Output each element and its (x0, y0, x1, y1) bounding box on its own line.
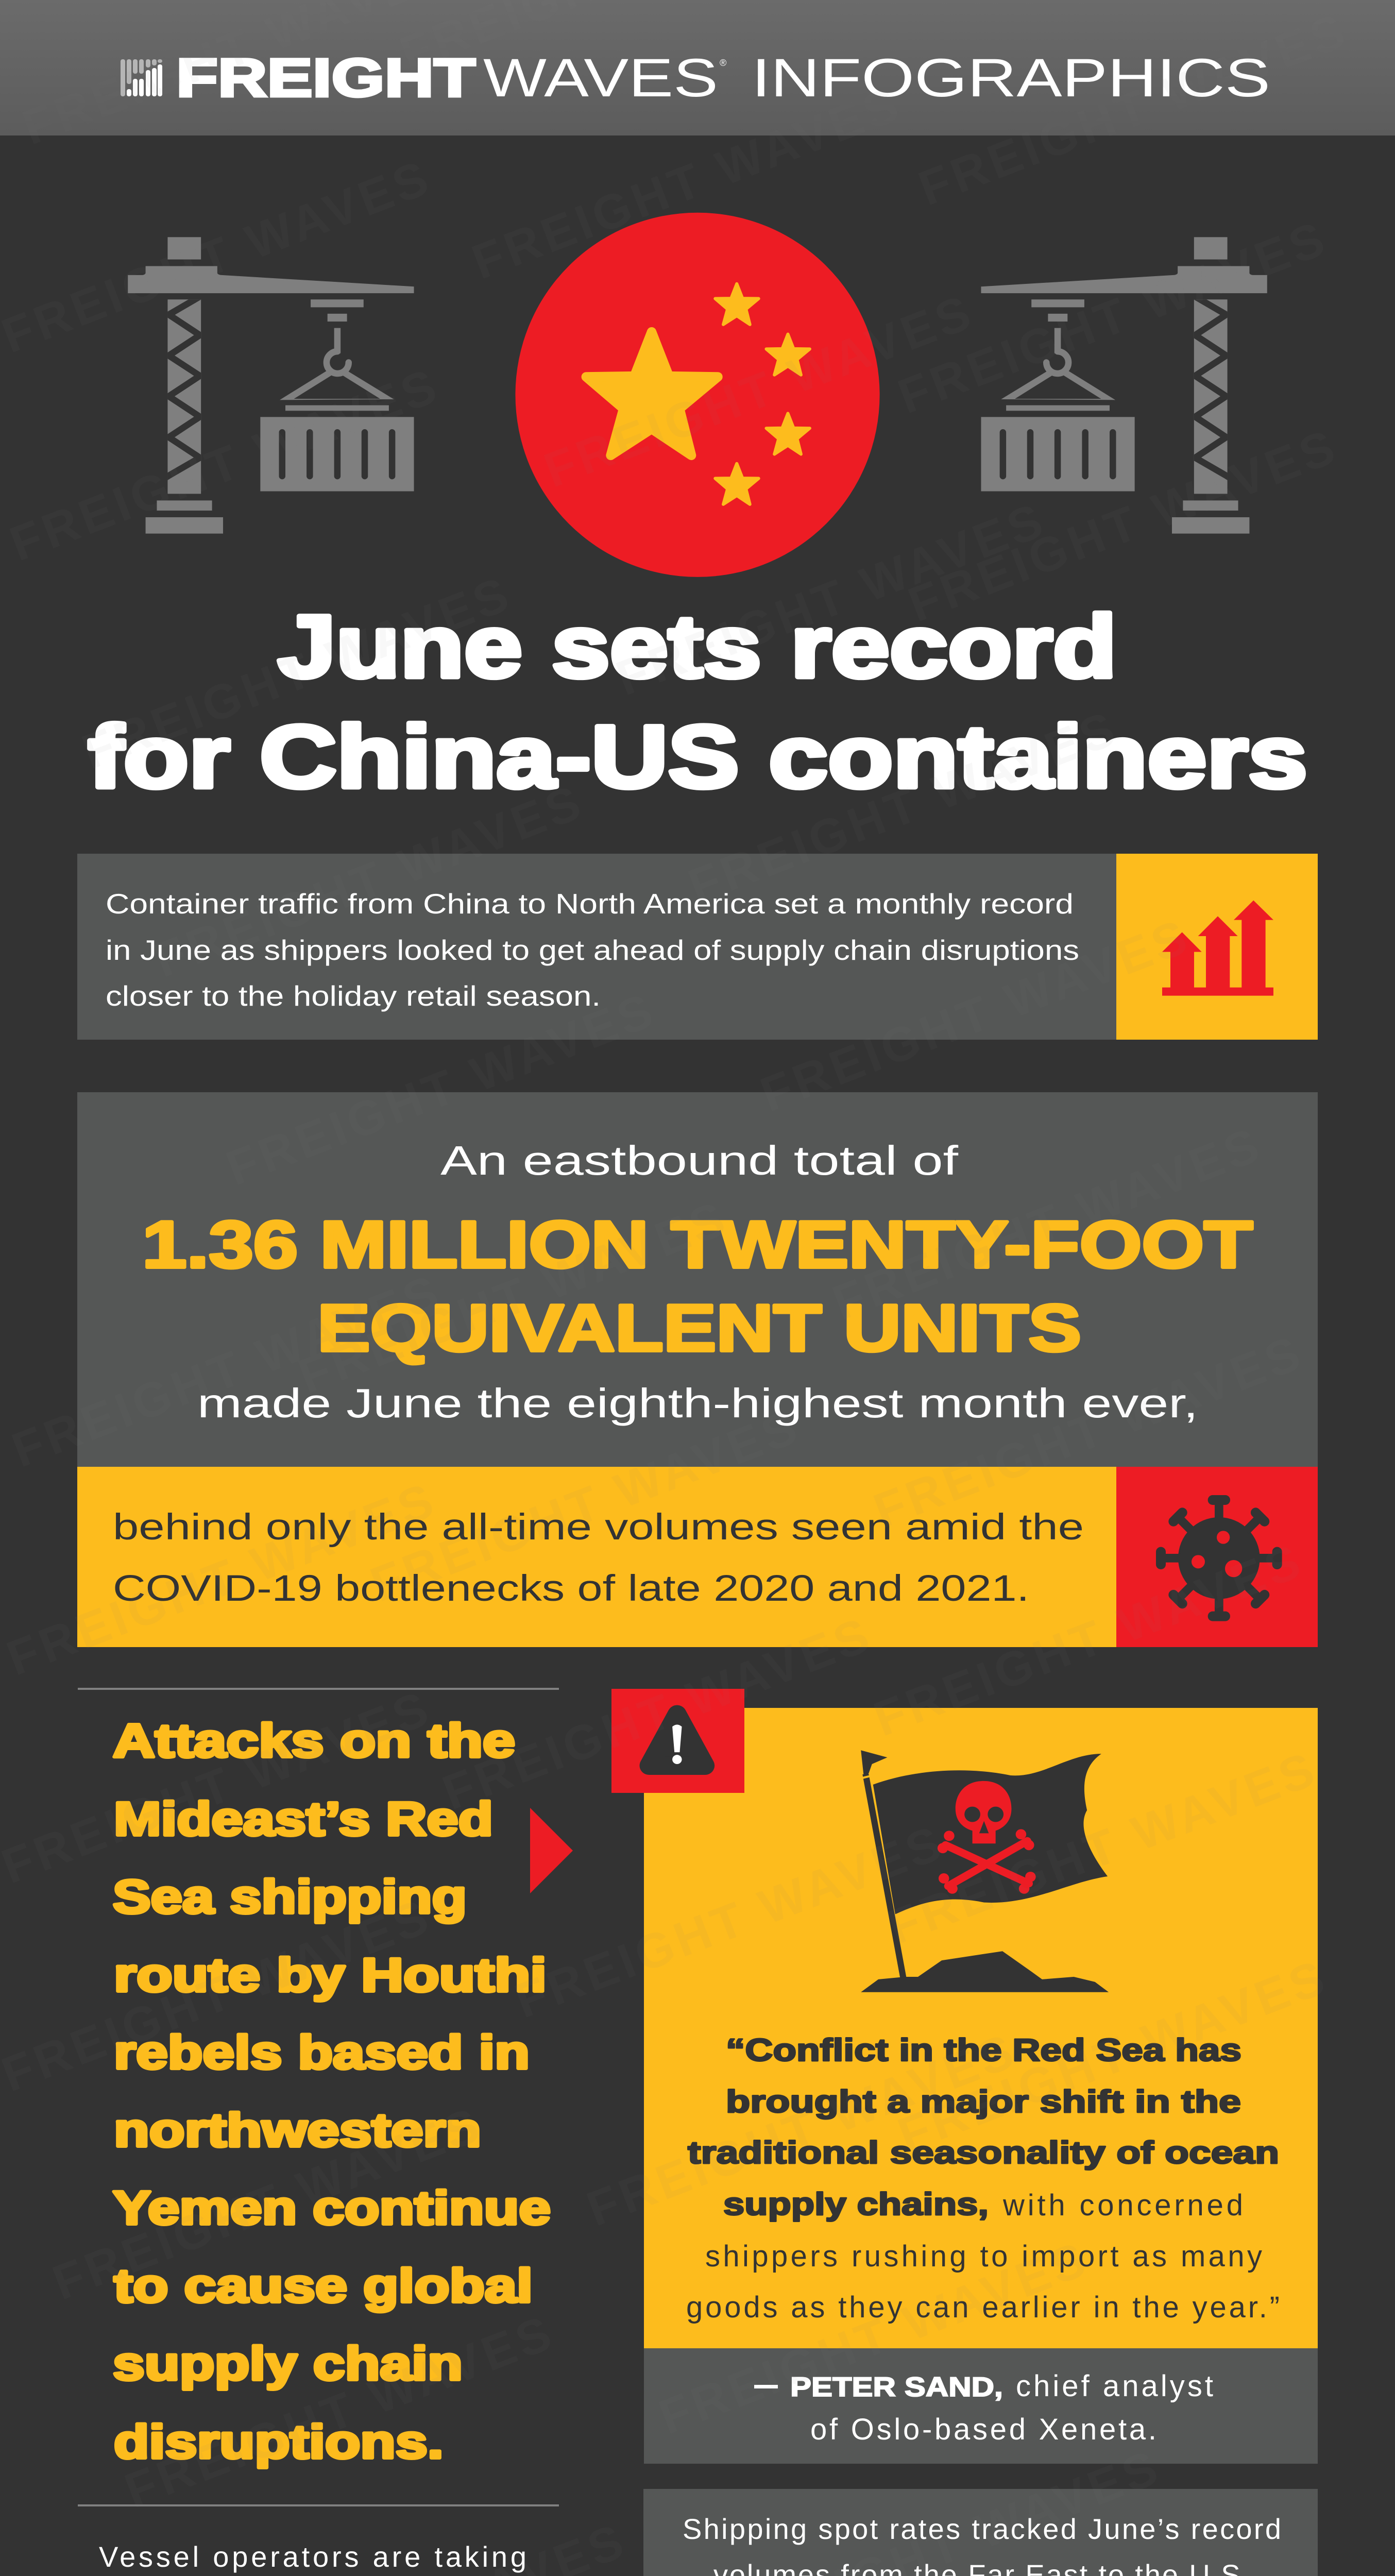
panel: eastbound total (77, 1092, 1318, 1467)
watermark pattern: FREIGHT WAVES (537, 284, 981, 498)
watermark pattern: FREIGHT WAVES (3, 358, 447, 572)
logo wordmark (176, 48, 1270, 108)
watermark pattern: FREIGHT WAVES (508, 1815, 952, 2029)
intro text: closer to the holiday retail season. (106, 980, 601, 1012)
intro text: in June as shippers looked to get ahead of supply chain disruptions (106, 934, 1079, 966)
headline text: Mideast’s Red (114, 1793, 493, 1845)
watermark pattern: FREIGHT WAVES (292, 1190, 736, 1404)
watermark pattern: FREIGHT WAVES (0, 1888, 439, 2103)
watermark pattern: FREIGHT WAVES (609, 492, 1053, 706)
icon: China flag circle (515, 213, 880, 577)
headline text: disruptions. (114, 2416, 444, 2468)
watermark pattern: FREIGHT WAVES (867, 1533, 1311, 1747)
panel: spot rates (643, 2489, 1318, 2576)
arrow: pointing right to quote (530, 1808, 573, 1893)
headline text: Yemen continue (113, 2182, 551, 2234)
text: eighth-highest month: made June the eighth-highest month ever, (197, 1380, 1198, 1426)
intro text: Container traffic from China to North America set a monthly record (106, 888, 1074, 920)
watermark pattern: FREIGHT WAVES (0, 1472, 444, 1686)
watermark pattern: FREIGHT WAVES (912, 2, 1356, 216)
big stat: 1.36 million TEU (142, 1208, 1253, 1365)
watermark pattern: FREIGHT WAVES (0, 1680, 439, 1894)
icon: warning triangle badge (611, 1689, 744, 1793)
logo wordmark: FREIGHT (176, 48, 475, 108)
logo wordmark: INFOGRAPHICS (752, 48, 1270, 108)
big stat: 1.36 million TEU: EQUIVALENT UNITS (317, 1291, 1081, 1365)
watermark pattern: FREIGHT WAVES (891, 210, 1335, 425)
watermark pattern: FREIGHT WAVES (118, 2304, 562, 2519)
watermark pattern: FREIGHT WAVES (219, 982, 664, 1196)
attribution text: chief analyst (1016, 2369, 1213, 2403)
logo mark (121, 59, 162, 96)
intro text (106, 888, 1079, 1012)
attribution text: PETER SAND, (790, 2372, 1003, 2402)
quote text: brought a major shift in the (726, 2084, 1241, 2119)
text: vessel operators: Vessel operators are taking (99, 2540, 526, 2573)
watermark pattern: FREIGHT WAVES (754, 908, 1198, 1123)
icon: right crane with container (981, 237, 1267, 534)
COVID text: COVID-19 bottlenecks of late 2020 and 2021. (113, 1568, 1029, 1609)
watermark pattern: FREIGHT WAVES (5, 1264, 449, 1478)
watermark pattern: FREIGHT WAVES (901, 418, 1346, 633)
headline text: supply chain (113, 2337, 463, 2390)
headline text: northwestern (114, 2104, 481, 2157)
panel: attribution (644, 2348, 1318, 2464)
watermark pattern: FREIGHT WAVES (580, 2023, 1024, 2237)
icon: pirate flag (861, 1750, 1109, 1992)
logo wordmark: ® (720, 58, 726, 68)
headline text: Attacks on the (113, 1715, 515, 1767)
spot rates text (683, 2513, 1281, 2576)
attribution text (754, 2369, 1213, 2446)
watermark pattern: FREIGHT WAVES (867, 1325, 1311, 1539)
quote text: with concerned (1002, 2189, 1243, 2222)
watermark pattern: FREIGHT WAVES (826, 1116, 1270, 1331)
icon: left crane with container (128, 237, 414, 534)
spot rates text: Shipping spot rates tracked June’s record (683, 2513, 1281, 2545)
panel: Red Sea attacks headline (78, 1688, 559, 2506)
quote text: supply chains, (723, 2187, 989, 2222)
watermark pattern: FREIGHT WAVES (682, 700, 1126, 914)
watermark pattern: FREIGHT WAVES (364, 1398, 808, 1613)
attribution text: of Oslo-based Xeneta. (810, 2413, 1156, 2446)
quote text (686, 2032, 1280, 2324)
watermark pattern: FREIGHT WAVES (46, 2096, 490, 2311)
big stat: 1.36 million TEU: 1.36 MILLION TWENTY-FOOT (142, 1208, 1253, 1282)
header bar (0, 0, 1395, 135)
watermark pattern: FREIGHT WAVES (891, 1949, 1335, 2163)
watermark pattern: FREIGHT WAVES (0, 149, 439, 364)
watermark pattern: FREIGHT WAVES (881, 1741, 1325, 1955)
text: an eastbound total of: An eastbound total of (440, 1138, 959, 1183)
quote text: shippers rushing to import as many (705, 2240, 1262, 2273)
panel: intro (77, 854, 1318, 1040)
watermark pattern: FREIGHT WAVES (75, 566, 519, 780)
headline text: to cause global (114, 2260, 533, 2312)
title: for China-US containers (88, 707, 1307, 806)
quote text: goods as they can earlier in the year.” (686, 2291, 1280, 2324)
icon: rising arrows (1162, 901, 1273, 996)
icon: virus (1156, 1495, 1282, 1621)
headline text: Sea shipping (113, 1871, 467, 1923)
title (88, 597, 1307, 806)
watermark pattern: FREIGHT WAVES (147, 774, 591, 988)
title: June sets record (278, 597, 1117, 696)
quote text: “Conflict in the Red Sea has (726, 2032, 1241, 2067)
headline text: route by Houthi (114, 1949, 547, 2002)
watermark pattern: FREIGHT WAVES (652, 2231, 1096, 2445)
watermark pattern: FREIGHT WAVES (465, 76, 909, 290)
headline text (113, 1715, 551, 2468)
panel: behind only COVID bottlenecks (77, 1467, 1318, 1647)
watermark pattern: FREIGHT WAVES (436, 1606, 880, 1821)
panel: Peter Sand quote (644, 1708, 1318, 2348)
headline text: rebels based in (114, 2026, 530, 2079)
COVID text: behind only the all-time volumes seen amid the (113, 1507, 1084, 1548)
logo wordmark: WAVES (483, 48, 718, 108)
COVID text (113, 1507, 1084, 1609)
quote text: traditional seasonality of ocean (688, 2135, 1279, 2170)
